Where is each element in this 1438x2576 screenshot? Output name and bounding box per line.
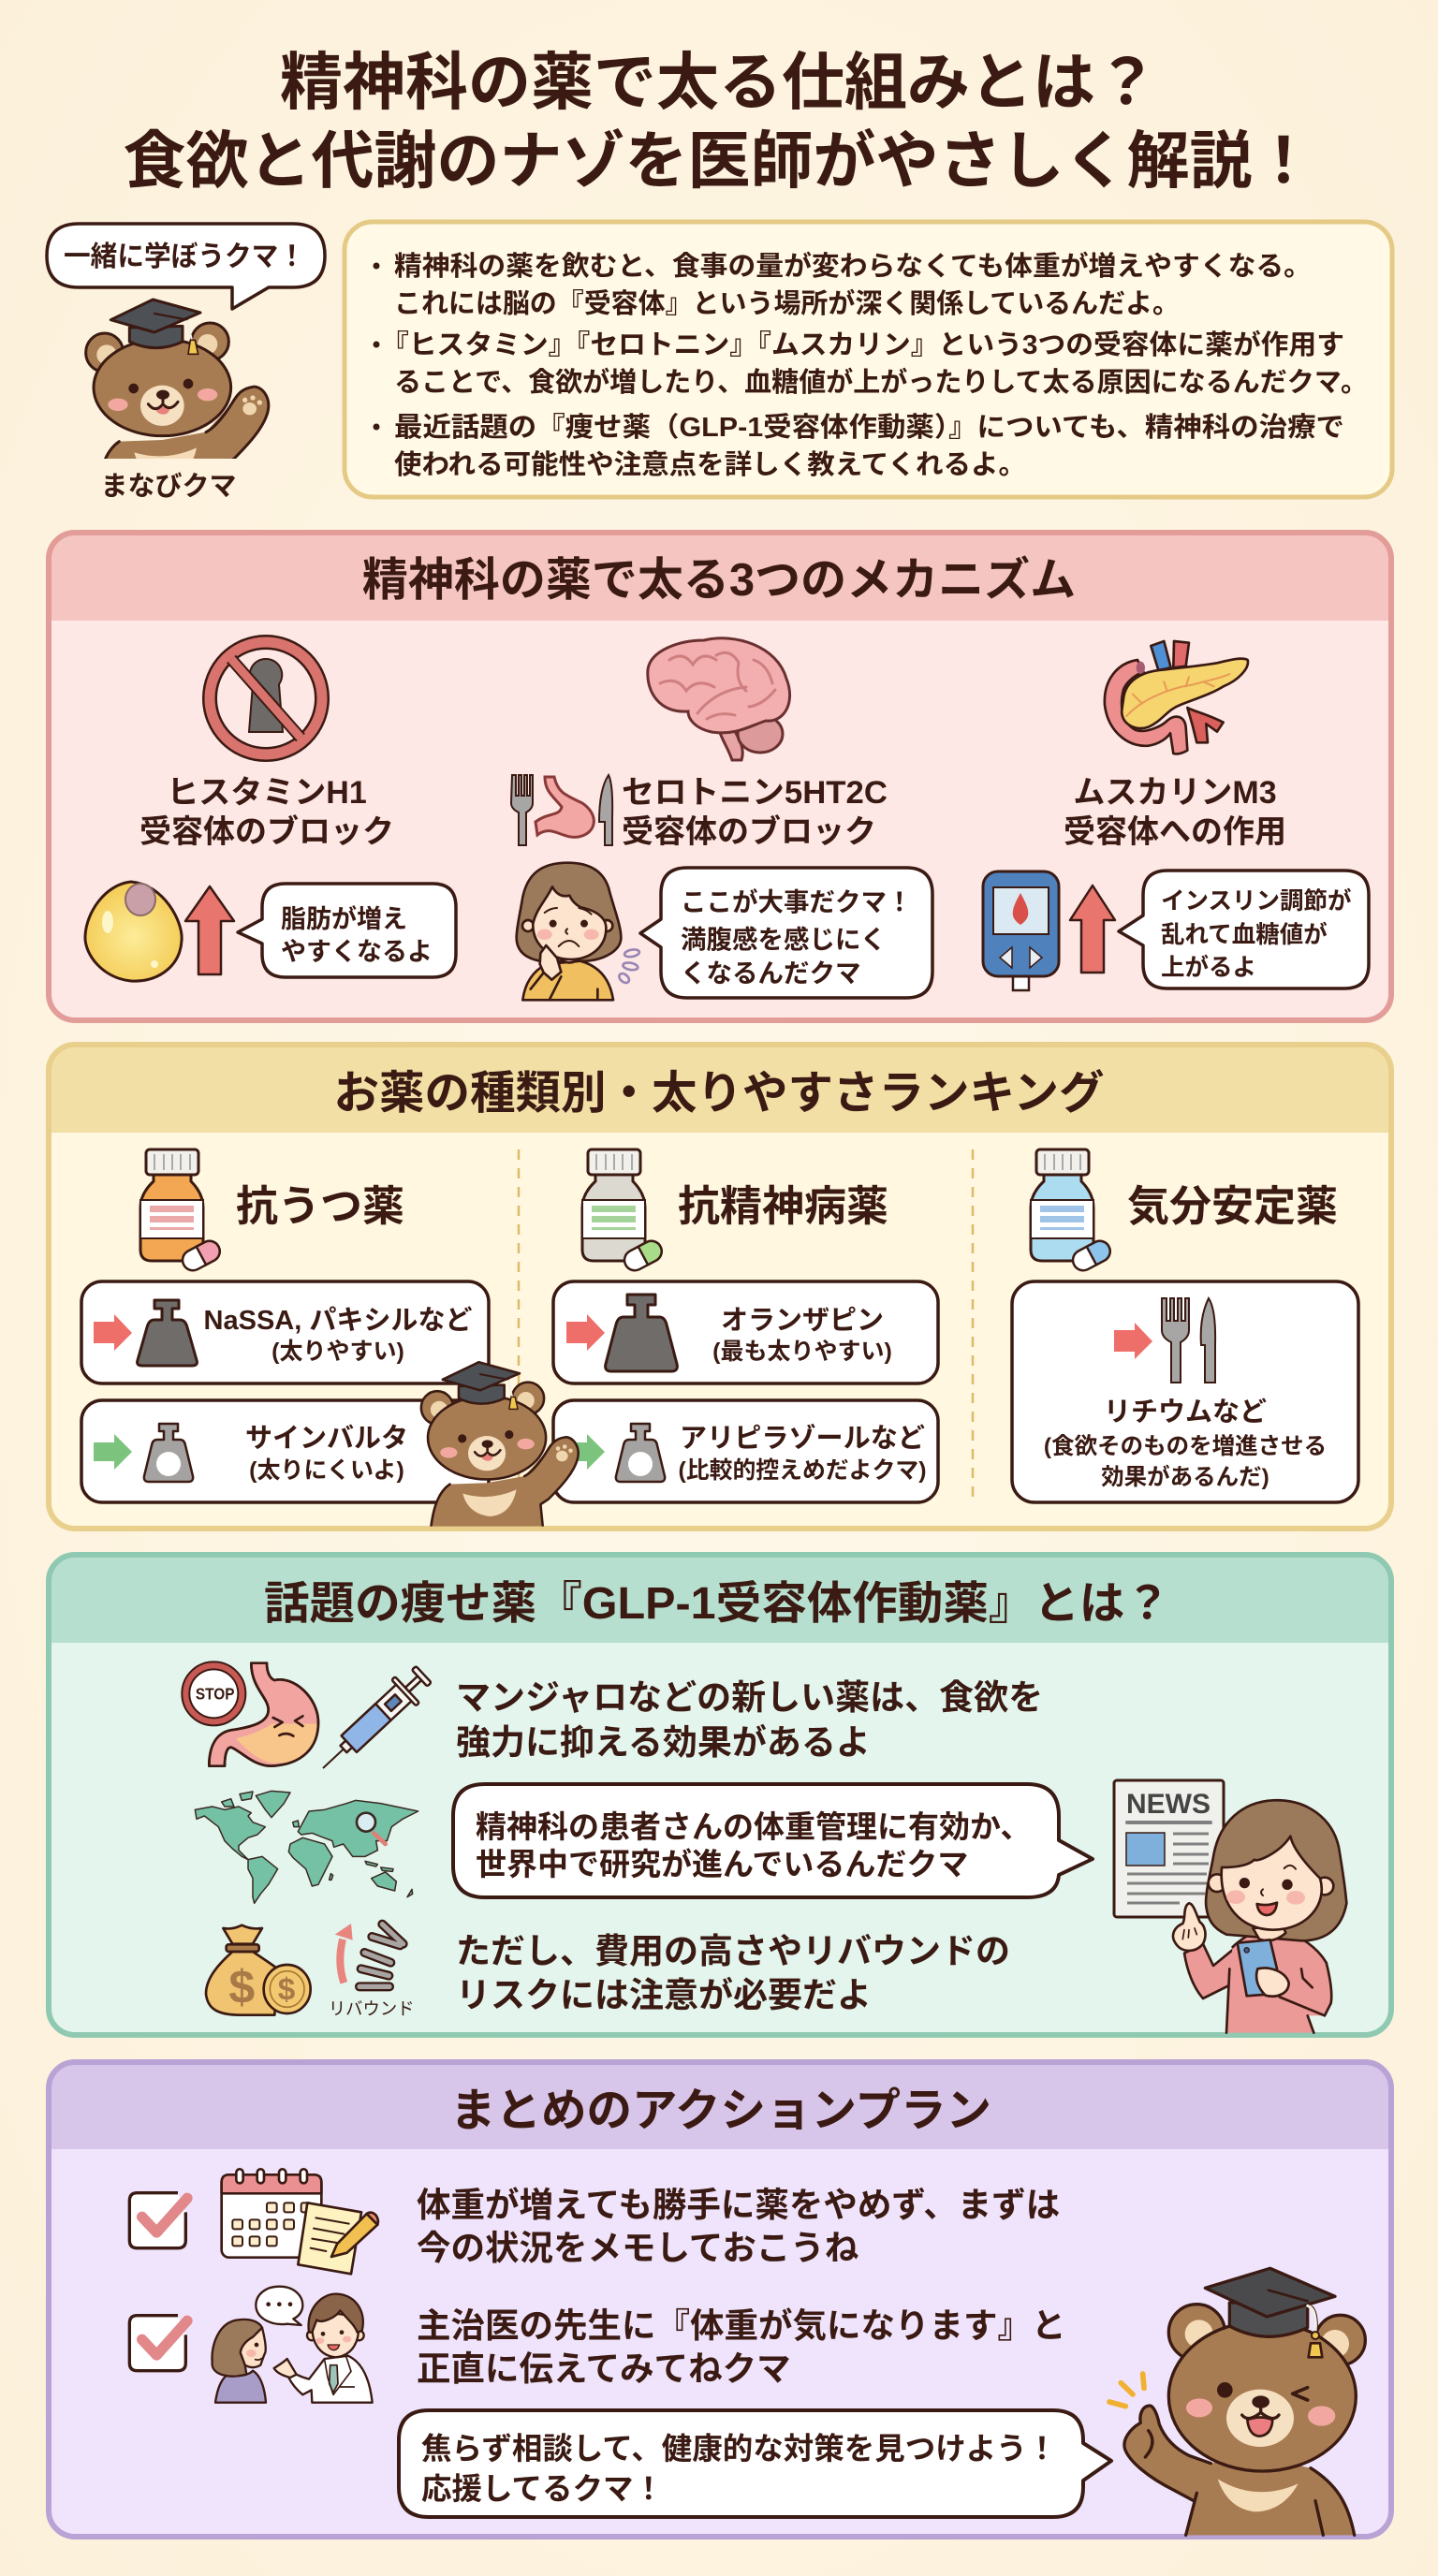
text: action 2: 正直に伝えてみてねクマ [417, 2349, 791, 2388]
callout: encouragement: 応援してるクマ！ [421, 2472, 664, 2506]
card: NaSSA: NaSSA, パキシルなど [204, 1305, 472, 1336]
icon: no entry keyhole [210, 642, 322, 754]
callout: insulin: 上がるよ [1161, 954, 1256, 981]
speech bubble: 一緒に学ぼうクマ: 一緒に学ぼうクマ！ [64, 242, 305, 272]
character: woman with smartphone [1173, 1800, 1346, 2033]
panel: GLP-1 [49, 1555, 1391, 2035]
text: Mounjaro: 強力に抑える効果があるよ [456, 1723, 871, 1762]
card: Aripiprazole: (比較的控えめだよクマ) [678, 1457, 927, 1484]
icon: orange bottle [140, 1149, 224, 1274]
card: Lithium [1012, 1281, 1358, 1502]
label: muscarine M3 [1064, 775, 1286, 850]
icon: money bag and coin: $ [278, 1973, 296, 2008]
card: Aripiprazole [553, 1400, 938, 1502]
callout: encouragement [399, 2410, 1111, 2517]
callout: worldwide research: 世界中で研究が進んでいるんだクマ [476, 1847, 968, 1881]
callout: encouragement: 焦らず相談して、健康的な対策を見つけよう！ [421, 2432, 1057, 2466]
card: Cymbalta: サインバルタ [245, 1423, 408, 1454]
text: cost and rebound: リスクには注意が必要だよ [456, 1976, 872, 2014]
text: action 1: 今の状況をメモしておこうね [417, 2229, 859, 2267]
panel: ranking [49, 1045, 1391, 1531]
callout: feeling full: 満腹感を感じにく [681, 925, 886, 954]
callout: worldwide research [453, 1784, 1093, 1897]
bullet list: 最近話題の『痩せ薬（GLP-1受容体作動薬）』についても、精神科の治療で [394, 412, 1344, 443]
heading: 精神科の薬で太る3つのメカニズム [362, 555, 1076, 606]
callout: insulin: 乱れて血糖値が [1161, 921, 1328, 948]
card: Olanzapine: オランザピン [721, 1306, 884, 1336]
panel: introduction [345, 222, 1392, 497]
icon: pancreas [1105, 641, 1248, 754]
icon: checkbox [129, 2193, 187, 2248]
icon: world map [195, 1791, 418, 1903]
icon: blue bottle [1031, 1149, 1114, 1274]
text: Mounjaro [456, 1678, 1043, 1762]
icon: stomach with stop sign: STOP [196, 1684, 234, 1703]
heading: 話題の痩せ薬『GLP-1受容体作動薬』とは？ [264, 1579, 1170, 1629]
icon: checkbox [129, 2316, 187, 2371]
character: big bear with thumbs up [1109, 2268, 1365, 2535]
callout: feeling full [640, 868, 932, 998]
label: histamine H1: ヒスタミンH1 [167, 775, 367, 811]
card: Aripiprazole: アリピラゾールなど [680, 1423, 925, 1454]
heading: お薬の種類別・太りやすさランキング [333, 1068, 1105, 1119]
card: Cymbalta [81, 1400, 489, 1502]
icon: money bag and coin [206, 1925, 311, 2015]
label: histamine H1 [139, 775, 394, 850]
text: action 2 [417, 2306, 1065, 2388]
title: 精神科の薬で太る仕組みとは？ [280, 48, 1158, 118]
icon: money bag and coin: $ [228, 1961, 255, 2013]
character: worried woman [517, 863, 640, 1000]
card: Cymbalta: (太りにくいよ) [249, 1457, 404, 1484]
card: Olanzapine: (最も太りやすい) [712, 1339, 892, 1365]
dashed dividers [519, 1149, 973, 1502]
text: cost and rebound: ただし、費用の高さやリバウンドの [456, 1932, 1010, 1970]
icon: fork, stomach and knife [511, 775, 612, 845]
character: waving bear [421, 1362, 579, 1531]
title: 食欲と代謝のナゾを医師がやさしく解説！ [124, 126, 1314, 197]
text: action 2: 主治医の先生に『体重が気になります』と [417, 2306, 1065, 2345]
arrow: up red [1070, 886, 1115, 973]
icon: stomach with stop sign [185, 1663, 321, 1766]
card: Lithium: 効果があるんだ) [1101, 1463, 1269, 1490]
icon: glucose meter [983, 871, 1059, 990]
callout: fat increases [238, 884, 456, 977]
heading: まとめのアクションプラン [450, 2086, 991, 2136]
icon: calendar and memo [222, 2169, 378, 2274]
label: muscarine M3: ムスカリンM3 [1073, 775, 1277, 811]
icon: rebound spring: リバウンド [329, 1999, 414, 2019]
title [124, 48, 1314, 197]
icon: brain [648, 638, 790, 760]
label: serotonin 5HT2C [622, 775, 888, 850]
icon: grey bottle [582, 1149, 666, 1274]
bullet list: 使われる可能性や注意点を詳しく教えてくれるよ。 [394, 449, 1026, 480]
bullet list: ることで、食欲が増したり、血糖値が上がったりして太る原因になるんだクマ。 [394, 366, 1368, 398]
text: action 1: 体重が増えても勝手に薬をやめず、まずは [417, 2186, 1060, 2224]
card: Lithium: リチウムなど [1104, 1397, 1267, 1427]
card: NaSSA [81, 1281, 489, 1383]
speech bubble: 一緒に学ぼうクマ [47, 224, 325, 309]
card: NaSSA: (太りやすい) [271, 1339, 404, 1365]
icon: rebound spring [329, 1924, 414, 2019]
panel: action plan [49, 2062, 1391, 2537]
callout: insulin: インスリン調節が [1161, 887, 1352, 915]
panel: 3 mechanisms [49, 533, 1391, 1020]
label: histamine H1: 受容体のブロック [139, 813, 394, 850]
icon: newspaper [1114, 1780, 1224, 1917]
arrow: up red [185, 886, 234, 974]
callout: worldwide research: 精神科の患者さんの体重管理に有効か、 [476, 1809, 1031, 1844]
bullet list: 精神科の薬を飲むと、食事の量が変わらなくても体重が増えやすくなる。 [394, 250, 1312, 282]
mascot bear: まなびクマ [84, 298, 270, 459]
text: Mounjaro: マンジャロなどの新しい薬は、食欲を [456, 1678, 1043, 1717]
bullet list: これには脳の『受容体』という場所が深く関係しているんだよ。 [394, 287, 1180, 319]
text: action 1 [417, 2186, 1060, 2267]
callout: insulin [1119, 871, 1369, 988]
label: muscarine M3: 受容体への作用 [1064, 814, 1286, 850]
icon: syringe [311, 1661, 435, 1781]
callout: fat increases: 脂肪が増え [281, 904, 407, 933]
heading: antipsychotics: 抗精神病薬 [678, 1182, 888, 1230]
icon: newspaper: NEWS [1126, 1789, 1211, 1820]
icon: fat cell [85, 882, 182, 981]
label: serotonin 5HT2C: セロトニン5HT2C [622, 775, 888, 811]
callout: feeling full: くなるんだクマ [681, 959, 861, 988]
text: cost and rebound [456, 1932, 1010, 2014]
bullet list [373, 250, 1368, 480]
heading: antidepressants: 抗うつ薬 [236, 1182, 404, 1230]
label: serotonin 5HT2C: 受容体のブロック [622, 813, 876, 850]
heading: mood stabilizers: 気分安定薬 [1127, 1182, 1338, 1230]
callout: feeling full: ここが大事だクマ！ [681, 887, 912, 916]
mascot name: まなびクマ [100, 471, 237, 502]
callout: fat increases: やすくなるよ [281, 938, 433, 966]
bullet list: 『ヒスタミン』『セロトニン』『ムスカリン』という3つの受容体に薬が作用す [381, 329, 1344, 360]
card: Lithium: (食欲そのものを増進させる [1044, 1433, 1327, 1459]
icon: doctor consultation [212, 2287, 373, 2403]
card: Olanzapine [553, 1281, 938, 1383]
